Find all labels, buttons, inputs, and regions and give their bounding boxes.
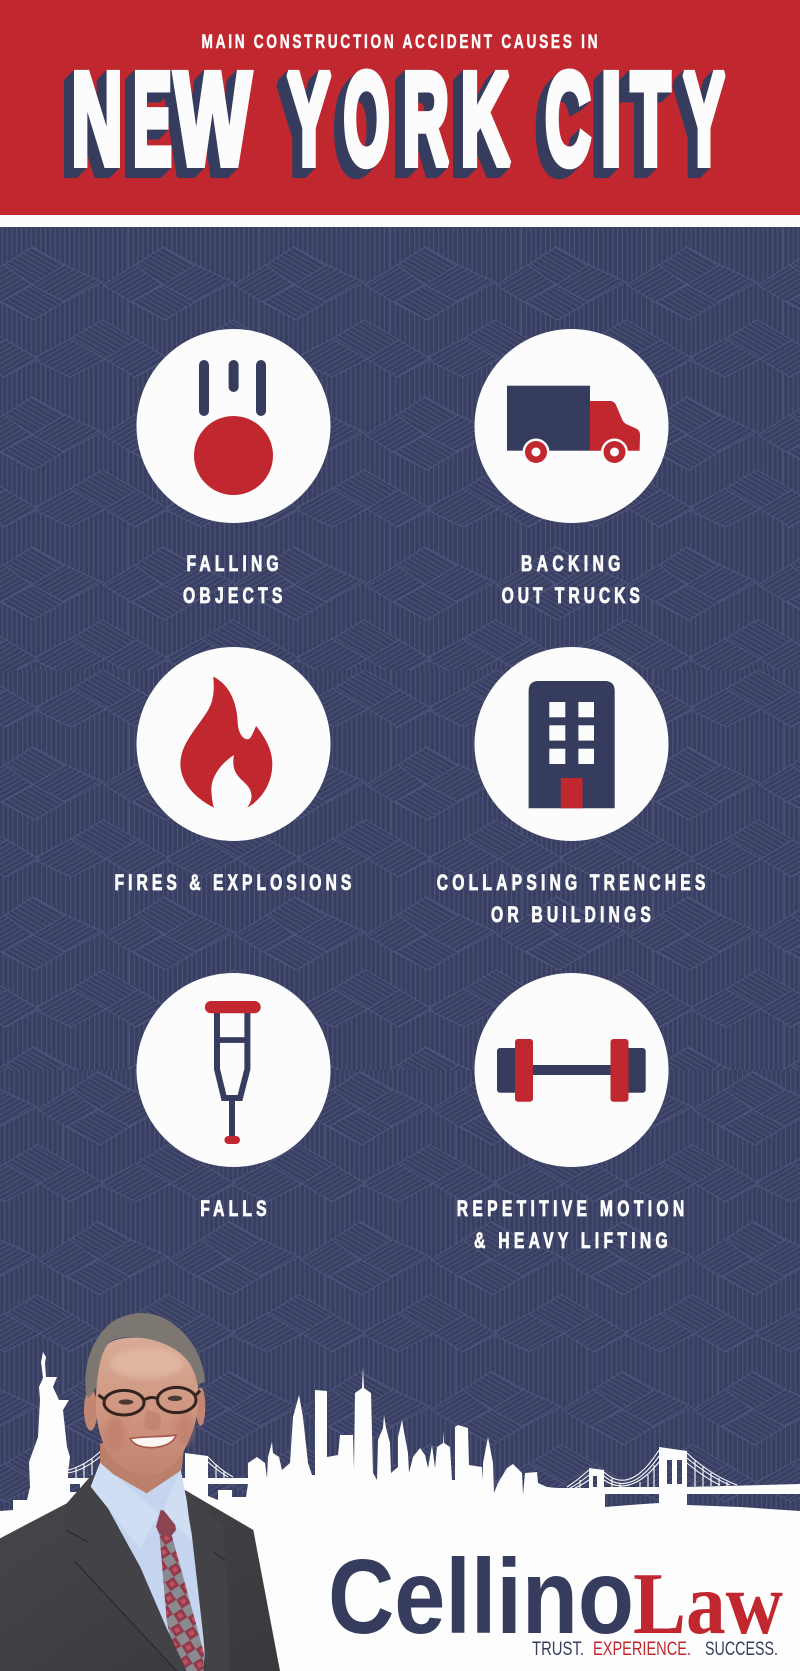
portrait of attorney	[0, 1313, 280, 1671]
label: OR BUILDINGS	[491, 904, 651, 928]
title: New York City: R	[403, 46, 449, 192]
icon: flame	[180, 677, 272, 808]
item: collapsing trenches or buildings	[437, 647, 705, 928]
face	[96, 1337, 198, 1475]
title: New York City: I	[601, 45, 622, 192]
title: New York City: Y	[287, 45, 331, 192]
title: New York City: W	[174, 46, 251, 193]
tie	[156, 1510, 204, 1671]
label: COLLAPSING TRENCHES	[437, 872, 705, 896]
wordmark Cellino: Cellino	[328, 1538, 634, 1656]
tagline: SUCCESS.	[705, 1639, 778, 1660]
icon: falling ball	[194, 360, 273, 495]
icon circle	[136, 647, 330, 841]
tagline	[532, 1639, 778, 1660]
panel: red header	[0, 0, 800, 227]
subtitle: MAIN CONSTRUCTION ACCIDENT CAUSES IN	[202, 31, 598, 53]
label: OBJECTS	[183, 585, 282, 609]
icon circle	[474, 329, 668, 523]
icon: dumbbell	[497, 1039, 646, 1102]
skyline silhouette	[0, 1352, 800, 1671]
hair	[85, 1313, 205, 1398]
glasses	[98, 1387, 200, 1415]
title: New York City: O	[343, 46, 390, 192]
smile	[130, 1435, 176, 1448]
label: FIRES & EXPLOSIONS	[114, 872, 351, 896]
item: repetitive motion and heavy lifting	[457, 973, 684, 1254]
icon circle	[136, 973, 330, 1167]
icon circle	[136, 329, 330, 523]
item: fires and explosions	[114, 647, 351, 896]
tagline: EXPERIENCE.	[593, 1639, 691, 1660]
title: New York City: N	[71, 47, 123, 193]
lapels	[66, 1477, 230, 1671]
nose	[144, 1410, 161, 1430]
title: New York City: Y	[683, 45, 725, 192]
icon: right bridge cables	[68, 1450, 737, 1488]
label: OUT TRUCKS	[502, 585, 640, 609]
label: FALLING	[186, 553, 279, 577]
tagline: TRUST.	[532, 1639, 584, 1660]
title: New York City: T	[631, 45, 670, 192]
label: REPETITIVE MOTION	[457, 1198, 684, 1222]
label	[502, 553, 640, 609]
title: New York City: E	[133, 45, 172, 192]
eyes	[119, 1399, 133, 1405]
title: New York City: K	[460, 46, 510, 193]
item: falls	[136, 973, 330, 1222]
icon: building	[529, 681, 615, 808]
label	[457, 1198, 684, 1254]
label: FALLS	[200, 1198, 267, 1222]
title: New York City: C	[545, 46, 591, 192]
icon circle	[474, 647, 668, 841]
neck	[100, 1437, 185, 1493]
logo: Cellino Law	[328, 1538, 783, 1660]
label	[183, 553, 282, 609]
title: New York City	[71, 45, 725, 193]
icon: crutch	[205, 1001, 261, 1144]
shirt	[91, 1463, 205, 1671]
ears	[84, 1389, 97, 1431]
face shading	[104, 1348, 194, 1450]
collar	[91, 1463, 192, 1548]
label: & HEAVY LIFTING	[474, 1230, 668, 1254]
item: falling objects	[136, 329, 330, 609]
suit	[0, 1475, 280, 1671]
label: BACKING	[521, 553, 620, 577]
wordmark Law: Law	[633, 1556, 783, 1653]
item: backing out trucks	[474, 329, 668, 609]
label	[437, 872, 705, 928]
icon circle	[474, 973, 668, 1167]
icon: truck	[507, 386, 640, 466]
